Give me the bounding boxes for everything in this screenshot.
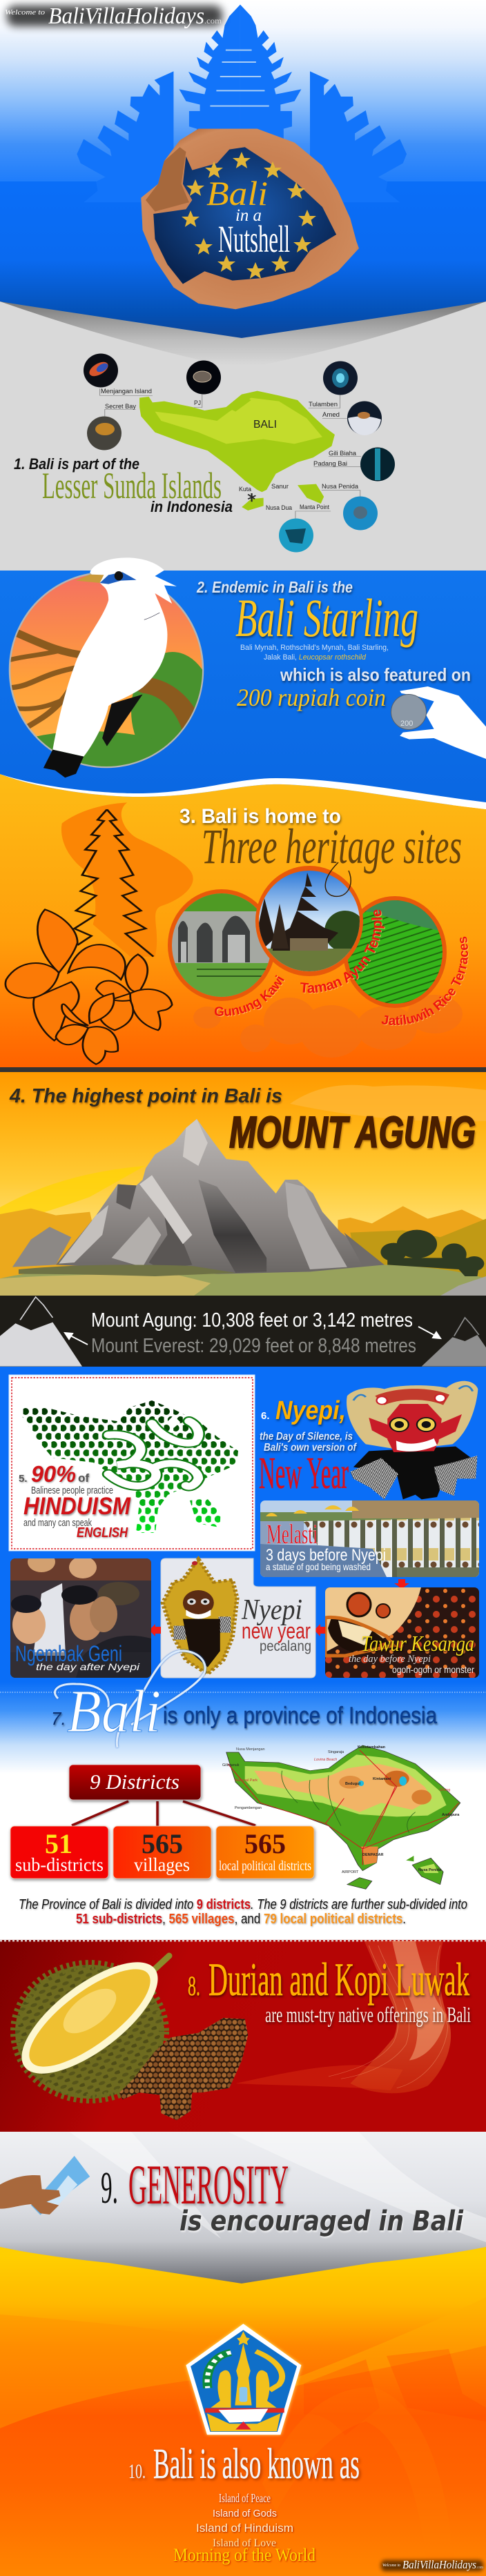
number: 10. (128, 2460, 146, 2483)
title: Melasti (266, 1518, 318, 1549)
photo panel: Tawur Kesanga (325, 1587, 479, 1678)
map labels: Nusa Penida (322, 483, 358, 490)
icon: hand with banknote (0, 2156, 90, 2215)
note detail (46, 2175, 77, 2208)
photo (10, 1552, 151, 1678)
hand (400, 686, 486, 759)
line 2: 51 sub-districts, 565 villages, and 79 local political districts. (76, 1912, 406, 1927)
welcome text: Welcome to (5, 8, 46, 17)
map labels: Padang Bai (313, 460, 347, 467)
crown rosettes (377, 1394, 445, 1405)
map small labels: Kubutambahan (358, 1745, 386, 1750)
arrow left (65, 1333, 88, 1345)
map small labels: Singaraja (328, 1750, 344, 1754)
section background: grey panel (0, 297, 486, 571)
connector lines (72, 1801, 255, 1826)
logo: footer (381, 2558, 483, 2571)
star (237, 2331, 250, 2345)
new year: new year (242, 1618, 311, 1643)
map small labels: Kintamani (373, 1777, 391, 1781)
map small labels: Nusa Penida (418, 1868, 442, 1872)
photo panel: Melasti (260, 1500, 479, 1577)
clouds (0, 1085, 486, 1225)
word English: ENGLISH (77, 1525, 128, 1540)
ribbon (219, 2409, 268, 2423)
caption: ogoh-ogoh or monster (392, 1664, 474, 1675)
artwork (325, 1587, 479, 1678)
decoration: light swooshes (0, 2297, 486, 2576)
illustration: kopi luwak beans (119, 2018, 248, 2120)
upper swoosh (290, 2297, 486, 2387)
gate left wing (77, 71, 173, 202)
dotted rule (0, 1692, 486, 1693)
heading 2: Bali Starling (196, 578, 471, 711)
arrow: Tawur to Nyepi (314, 1624, 325, 1636)
bird (43, 557, 177, 777)
footer glow (381, 2560, 483, 2571)
illustration: durian (5, 1943, 175, 2099)
Everest stat: Mount Everest: 29,029 feet or 8,848 metres (91, 1335, 416, 1357)
footer welcome: Welcome to (382, 2564, 400, 2568)
main rock (56, 1119, 385, 1274)
yellow flesh (15, 1953, 164, 2083)
left glow (0, 2315, 221, 2428)
panel 4 background: sunset sky (0, 1072, 486, 1300)
stem (150, 1956, 169, 1973)
stat 90 percent: of (78, 1472, 89, 1485)
ring (255, 866, 363, 976)
illustration: Mount Agung landscape (0, 1119, 486, 1297)
rivers (282, 1771, 416, 1833)
divider bar (0, 1067, 486, 1072)
number: 8. (188, 1970, 200, 2001)
Nusa Penida (412, 1858, 443, 1885)
icon: frangipani flowers (6, 909, 172, 1064)
map small labels: Lovina Beach (314, 1758, 337, 1762)
dive photo Amed (347, 402, 382, 435)
word Nyepi: Nyepi, (275, 1396, 346, 1425)
black beard (353, 1447, 477, 1499)
box 565 local political districts (216, 1826, 314, 1879)
gate light tier bars (210, 50, 269, 106)
map labels: Manta Point (300, 504, 329, 511)
arm and hand (0, 2175, 61, 2215)
Nusa Lembongan (406, 1856, 414, 1861)
map small labels: Nusa Menjangan (236, 1747, 265, 1752)
ribbon highlight (392, 1941, 447, 2061)
panel 10 background: orange (0, 2242, 486, 2576)
heading 8: Durian and Kopi Luwak (188, 1953, 471, 2027)
heading line 1: 1. Bali is part of the (14, 455, 139, 473)
island shape (100, 388, 361, 519)
heading 1: Lesser Sunda Islands (14, 455, 233, 515)
map labels: Amed (322, 411, 340, 418)
heading 6: Nyepi: New Year (259, 1448, 349, 1498)
checkered cloth right (434, 1456, 477, 1496)
trees (380, 1230, 484, 1276)
white shield (186, 2324, 301, 2435)
map labels: Menjangan Island (101, 388, 152, 395)
banknote (31, 2156, 90, 2215)
ring (343, 896, 447, 1008)
photo content (255, 871, 366, 973)
ring (168, 889, 275, 1001)
header lower band (0, 181, 486, 338)
title: Nutshell: Nutshell (218, 218, 290, 260)
curve right (228, 2132, 486, 2242)
icon: Bali provincial crest (186, 2324, 301, 2435)
section background: blue to white (0, 1367, 486, 1941)
coin (391, 694, 427, 730)
title: Bali: Bali (206, 174, 268, 212)
side ears (369, 1414, 462, 1440)
label Taman Ayun Temple: Taman Ayun Temple (300, 909, 385, 993)
nickname Love: Island of Love (213, 2537, 276, 2549)
white card (9, 1375, 255, 1551)
script Nyepi: Nyepi (241, 1594, 302, 1626)
map labels: Sanur (271, 483, 289, 490)
script swash loop (325, 862, 351, 896)
coin value: 200 (400, 720, 413, 728)
checkered cloth left (350, 1458, 398, 1499)
title: Ngembak Geni (15, 1641, 122, 1666)
deep highland (385, 1771, 409, 1787)
word Hinduism: HINDUISM (23, 1493, 131, 1520)
map labels: PJ (194, 399, 201, 406)
far hills (0, 1209, 106, 1285)
base (207, 2413, 280, 2431)
box 51 sub-districts (10, 1826, 108, 1879)
panel 9 background: grey chevron (0, 2132, 486, 2283)
stats bar: mountain heights (0, 1296, 486, 1367)
arrow: Melasti to Tawur (394, 1579, 409, 1589)
photo content (172, 893, 271, 998)
grass (0, 1265, 486, 1297)
dive photo Gili Biaha (360, 447, 395, 482)
map labels: BALI (253, 419, 277, 430)
lakes (399, 1776, 407, 1785)
Everest mountain icon (422, 1318, 486, 1367)
site name: BaliVillaHolidays (48, 3, 204, 29)
logo dark glow (7, 6, 222, 26)
site labels (215, 909, 469, 1027)
map small labels: Amlapura (442, 1813, 460, 1817)
white wave band (0, 774, 486, 809)
day of silence: the Day of Silence, is (260, 1431, 353, 1443)
map small labels: Bedugul (345, 1782, 360, 1786)
number: 9. (101, 2163, 118, 2213)
shadow under header chevron (0, 301, 486, 369)
box 51 sub-districts: 51 (45, 1828, 72, 1859)
rest of heading: is only a province of Indonesia (163, 1703, 437, 1729)
left rock (12, 1227, 71, 1267)
dive photo PJ (186, 360, 221, 395)
logo: BaliVillaHolidays (5, 3, 222, 29)
ribbon mesh (329, 1945, 448, 2088)
heading 10: Bali nicknames (128, 2441, 360, 2565)
gold tower (235, 2344, 252, 2406)
rice sprig (255, 2351, 282, 2390)
stat 90 percent (19, 1461, 89, 1487)
footer name: BaliVillaHolidays (402, 2558, 476, 2571)
panel 8 background: red (0, 1940, 486, 2132)
Om symbol (108, 1416, 199, 1487)
label Gunung Kawi: Gunung Kawi (215, 975, 285, 1017)
shell (141, 129, 359, 309)
coin value: 200 rupiah coin (237, 684, 386, 711)
heading 9: Generosity: GENEROSITY (128, 2153, 289, 2216)
decoration: light curves (69, 2132, 486, 2242)
red face (387, 1404, 442, 1452)
dive photo Nusa Penida (343, 497, 378, 530)
map labels (101, 388, 358, 511)
map: relief map of Bali (226, 1745, 460, 1889)
map labels: Gili Biaha (329, 450, 356, 457)
map small labels: AIRPORT (342, 1870, 359, 1874)
photo content (347, 900, 443, 1004)
box 565 local political districts: 565 (244, 1828, 286, 1859)
leader lines (100, 388, 361, 519)
caption: a statue of god being washed (266, 1561, 371, 1572)
card (161, 1558, 315, 1678)
map labels: Nusa Dua (266, 504, 292, 511)
box 565 local political districts: local political districts (219, 1859, 311, 1874)
zigzag edge (0, 1940, 486, 1941)
panel 2 background: blue (0, 571, 486, 805)
map small labels (222, 1745, 460, 1874)
photo panel: Ngembak Geni (10, 1552, 151, 1678)
chart: district hierarchy (10, 1765, 314, 1879)
photo (260, 1500, 479, 1577)
orange field (0, 774, 486, 1067)
text block: district summary (19, 1897, 467, 1927)
map small labels: DENPASAR (362, 1853, 383, 1857)
map labels: Tulamben (309, 401, 338, 408)
number: 6. (261, 1410, 270, 1422)
chain (205, 2408, 284, 2412)
panel 5: Hinduism map (9, 1375, 255, 1551)
map small labels: Gilimanuk (222, 1763, 240, 1767)
map labels: Secret Bay (105, 403, 136, 410)
heading line 2: Lesser Sunda Islands (42, 465, 222, 506)
icon: walnut shell with title (141, 129, 359, 309)
icon: hand holding coin (391, 686, 486, 759)
shrine door (240, 2387, 247, 2402)
crown (347, 1381, 478, 1449)
bush and branches (11, 629, 202, 766)
flesh highlight (56, 1980, 124, 2042)
map small labels: Diving (440, 1788, 450, 1792)
photo: Gunung Kawi (168, 889, 275, 1001)
teeth (396, 1438, 437, 1452)
dive photo Tulamben (323, 361, 358, 395)
footer .com: .com (476, 2566, 483, 2570)
dashed border (12, 1378, 253, 1549)
Denpasar zone (361, 1847, 378, 1865)
lotus (235, 2421, 251, 2430)
Barong gold mask (163, 1559, 237, 1674)
gate central tower (179, 5, 301, 157)
heading 9: Generosity (101, 2153, 464, 2237)
illustration: Barong mask (347, 1381, 478, 1499)
husk (15, 1965, 164, 2099)
timing: 3 days before Nyepi (266, 1546, 386, 1565)
red petals (304, 2349, 486, 2435)
orange highland (254, 1764, 432, 1812)
panel: Nyepi new year pecalang (161, 1558, 315, 1678)
arc (262, 2387, 456, 2576)
medallion (10, 573, 203, 767)
gate right wing (310, 71, 407, 202)
heading 6: Nyepi (259, 1396, 357, 1498)
decoration: faded blossoms (193, 995, 463, 1058)
timing: the day before Nyepi (349, 1654, 431, 1665)
icon: Balinese split gate (77, 5, 407, 202)
map labels: Kuta (239, 486, 251, 493)
stat 90 percent: 5. (19, 1473, 28, 1485)
pecalang: pecalang (260, 1638, 311, 1654)
road network (228, 1750, 459, 1865)
number: 7. (51, 1708, 66, 1729)
script Bali: Bali (67, 1678, 161, 1745)
box 565 villages: villages (134, 1854, 190, 1875)
icon: pagoda outline (75, 809, 153, 957)
ribbon tail (235, 2065, 403, 2090)
photo: Taman Ayun Temple (255, 866, 366, 976)
map small labels: Pengambengan (235, 1806, 262, 1810)
box 9 districts (69, 1765, 201, 1800)
line English: and many can speak (23, 1517, 92, 1529)
dive photo Menjangan Island (84, 353, 118, 388)
intro line: 4. The highest point in Bali is (9, 1085, 282, 1107)
heading 3: heritage sites (179, 805, 462, 874)
gold gates (211, 2370, 277, 2408)
base shrubs (19, 1265, 235, 1276)
rock shading (198, 1180, 266, 1273)
cotton sprig (207, 2352, 231, 2388)
script loops (55, 1651, 205, 1747)
Agung mountain icon (0, 1297, 82, 1367)
latin name: Jalak Bali, Leucopsar rothschild (264, 653, 367, 662)
line practice: Balinese people practice (31, 1485, 113, 1496)
bar (0, 1296, 486, 1367)
stat 90 percent: 90% (31, 1461, 76, 1487)
heading 7: Bali province (51, 1651, 437, 1747)
box 565 villages (113, 1826, 211, 1879)
beans cluster (119, 2018, 248, 2120)
nickname Peace: Island of Peace (219, 2491, 271, 2505)
arrow right (418, 1327, 440, 1338)
right boulder (440, 1276, 486, 1296)
eyes (390, 1418, 409, 1431)
decoration: orange ribbon (235, 1941, 451, 2093)
nickname Morning of the World: Morning of the World (173, 2545, 315, 2565)
intro line: 2. Endemic in Bali is the (196, 578, 353, 596)
label Jatiluwih Rice Terraces: Jatiluwih Rice Terraces (381, 937, 469, 1027)
blue shield (191, 2330, 297, 2432)
dive photo Secret Bay (87, 417, 122, 450)
light midland (245, 1754, 447, 1816)
cream rind (5, 1943, 175, 2093)
title: in a: in a (235, 206, 262, 225)
.com: .com (204, 16, 222, 26)
map: Bali island with dive sites (84, 353, 395, 552)
panel 3 background: orange wave (0, 774, 486, 1067)
heading line 3: in Indonesia (150, 498, 233, 515)
map small labels: National Park (235, 1779, 257, 1783)
other names: Bali Mynah, Rothschild's Mynah, Bali Starling, (240, 644, 389, 652)
nickname Gods: Island of Gods (213, 2508, 277, 2519)
dive photo Manta Point (279, 519, 313, 552)
heading 4: Mount Agung (9, 1085, 476, 1157)
decoration: orange swirl (61, 802, 193, 957)
arrow: Nyepi to Ngembak (149, 1624, 161, 1636)
ribbon body (350, 1941, 451, 2093)
green lowland (226, 1745, 460, 1871)
curve left (69, 2132, 221, 2239)
box 51 sub-districts: sub-districts (15, 1854, 104, 1875)
section background: header sky (0, 0, 486, 181)
intro line: 3. Bali is home to (179, 805, 341, 828)
dot map of Bali (22, 1400, 238, 1533)
box 565 villages: 565 (142, 1828, 183, 1859)
near hill (350, 1219, 486, 1285)
box 9 districts: 9 Districts (90, 1770, 179, 1794)
stars (182, 152, 316, 279)
photo: Jatiluwih Rice Terraces (343, 896, 447, 1008)
illustration: Bali Starling medallion (8, 557, 204, 778)
Agung stat: Mount Agung: 10,308 feet or 3,142 metres (91, 1309, 413, 1331)
nickname Hinduism: Island of Hinduism (196, 2521, 293, 2535)
caption: the day after Nyepi (36, 1661, 140, 1672)
crown band (375, 1389, 449, 1405)
own version: Bali's own version of (264, 1442, 357, 1454)
Bukit peninsula (347, 1878, 372, 1889)
crown ornaments (353, 1386, 473, 1400)
